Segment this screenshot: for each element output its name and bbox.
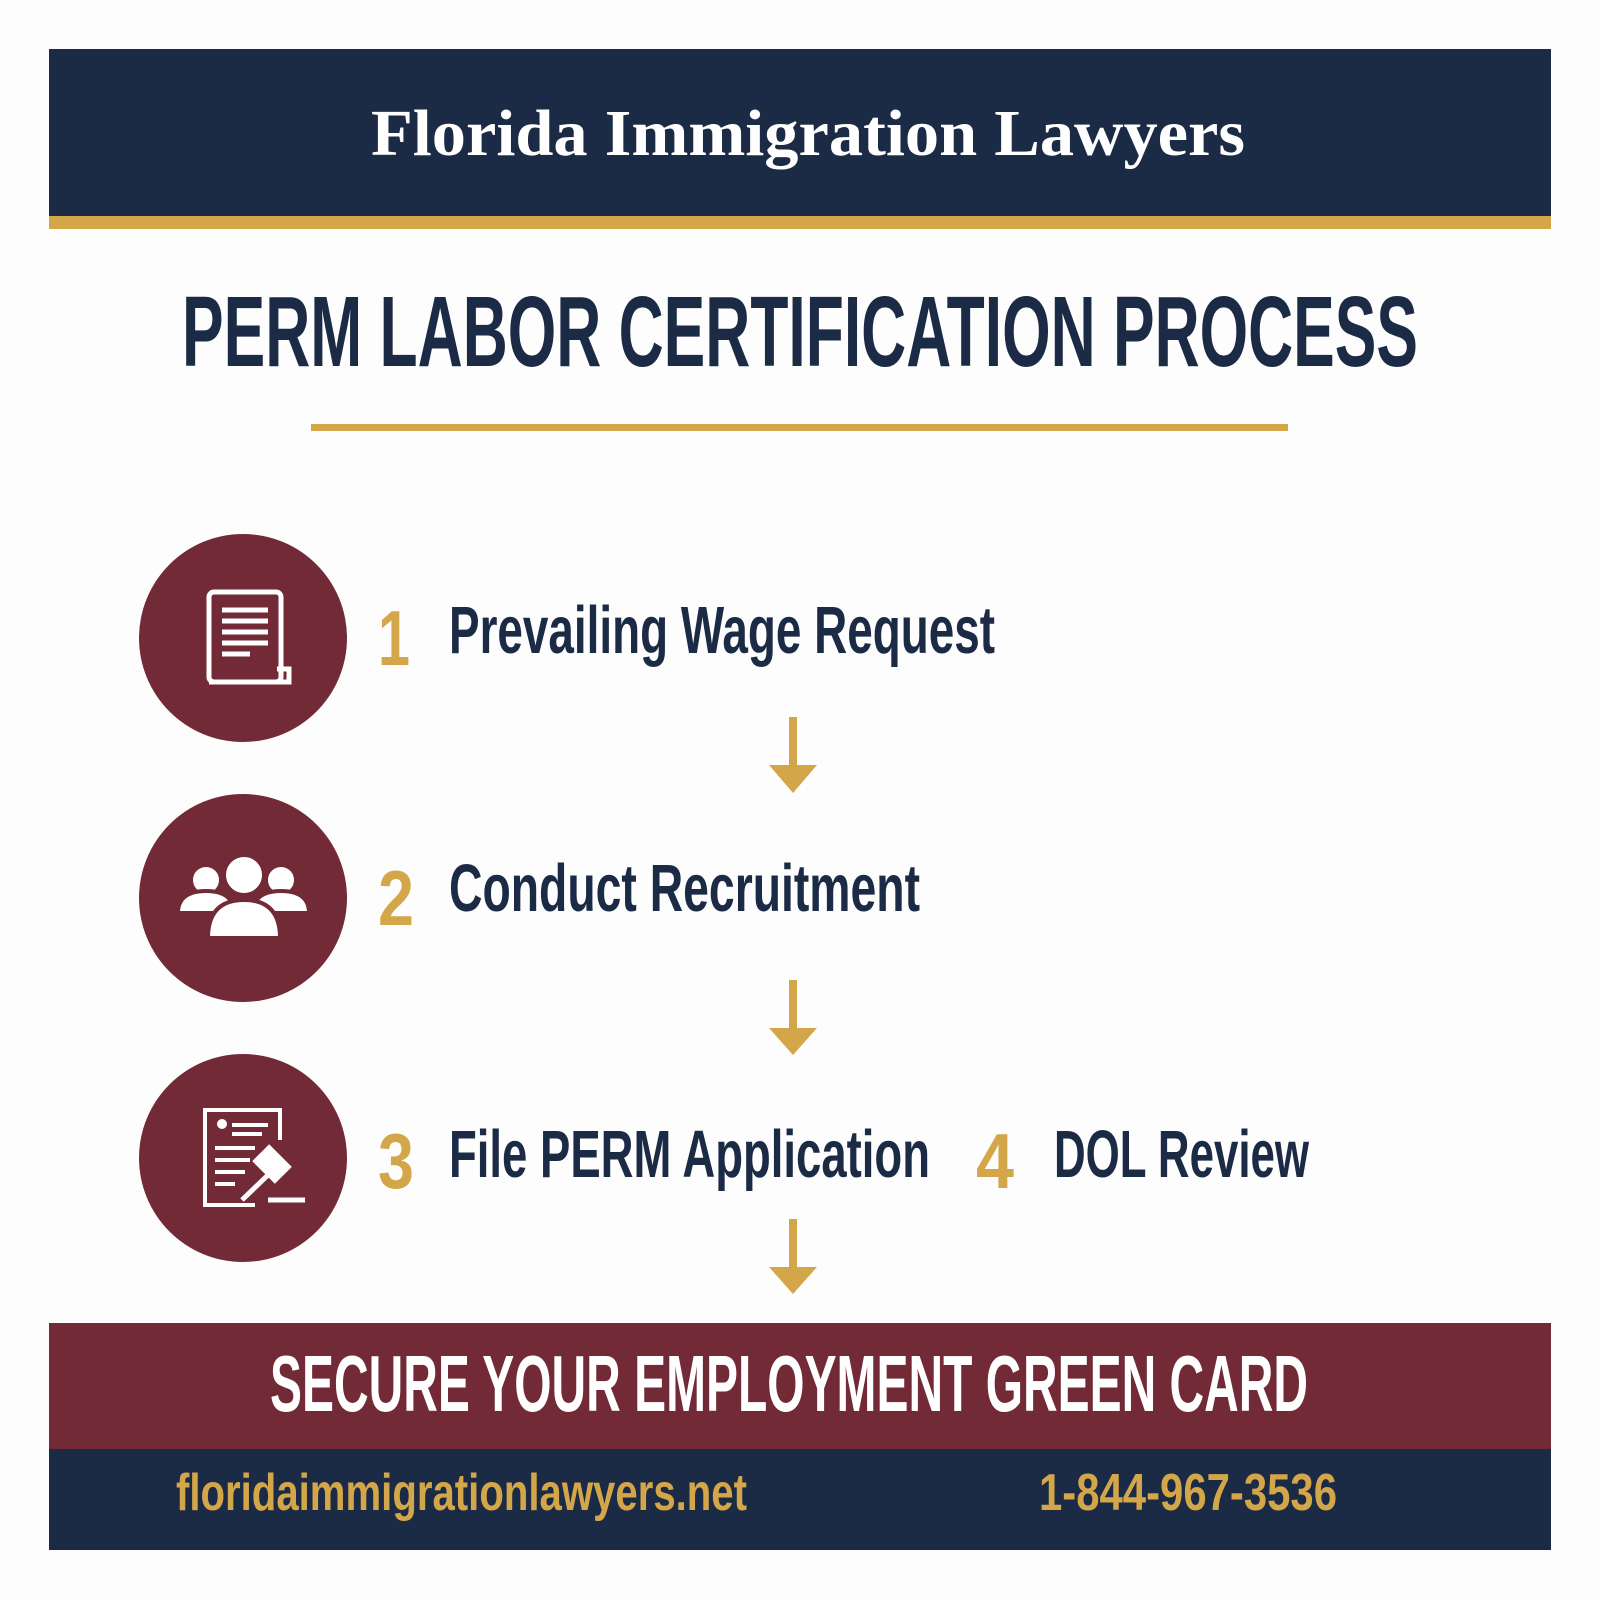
step 2 <box>139 794 920 1002</box>
arrow 1 <box>769 717 817 793</box>
icon: document <box>209 592 289 682</box>
icon: application with gavel <box>205 1110 305 1205</box>
step 4: DOL Review <box>1054 1117 1310 1192</box>
step 4: 4 <box>976 1117 1014 1205</box>
header title: Florida Immigration Lawyers <box>371 97 1245 170</box>
title underline <box>311 424 1288 431</box>
step 3: 3 <box>378 1117 414 1205</box>
arrow 2 <box>769 980 817 1055</box>
footer: contact: floridaimmigrationlawyers.net <box>176 1464 747 1522</box>
step 3 <box>139 1054 930 1262</box>
step 2: Conduct Recruitment <box>449 851 920 926</box>
header bar <box>49 49 1551 229</box>
step 3: File PERM Application <box>449 1117 930 1192</box>
step 4 <box>976 1117 1310 1205</box>
banner: call to action <box>49 1323 1551 1450</box>
step 1: Prevailing Wage Request <box>449 593 995 668</box>
footer: contact <box>49 1449 1551 1550</box>
step 1 <box>139 534 995 742</box>
icon: people <box>178 855 309 938</box>
arrow 3 <box>769 1219 817 1294</box>
step 1: 1 <box>378 594 410 682</box>
footer: contact: 1-844-967-3536 <box>1039 1464 1337 1522</box>
step 2: 2 <box>378 854 414 942</box>
